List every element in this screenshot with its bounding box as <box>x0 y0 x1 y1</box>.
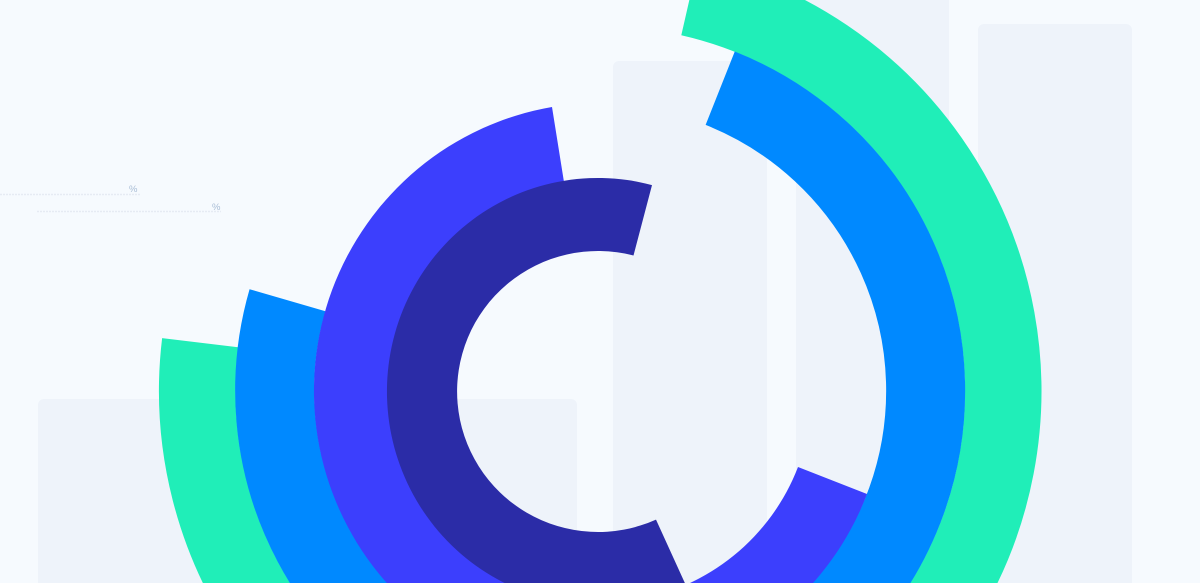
faint label two: % <box>212 202 221 213</box>
radial ring: dark navy inner <box>387 178 686 583</box>
background bar 4 <box>978 24 1132 583</box>
radial ring: indigo <box>314 107 867 583</box>
radial ring: blue <box>275 88 926 583</box>
background bar 3 <box>796 0 949 583</box>
background bar 2 <box>613 61 767 583</box>
radial ring: green outer <box>197 0 1003 583</box>
faint label one: % <box>129 184 138 195</box>
background bar 1 <box>38 399 577 583</box>
